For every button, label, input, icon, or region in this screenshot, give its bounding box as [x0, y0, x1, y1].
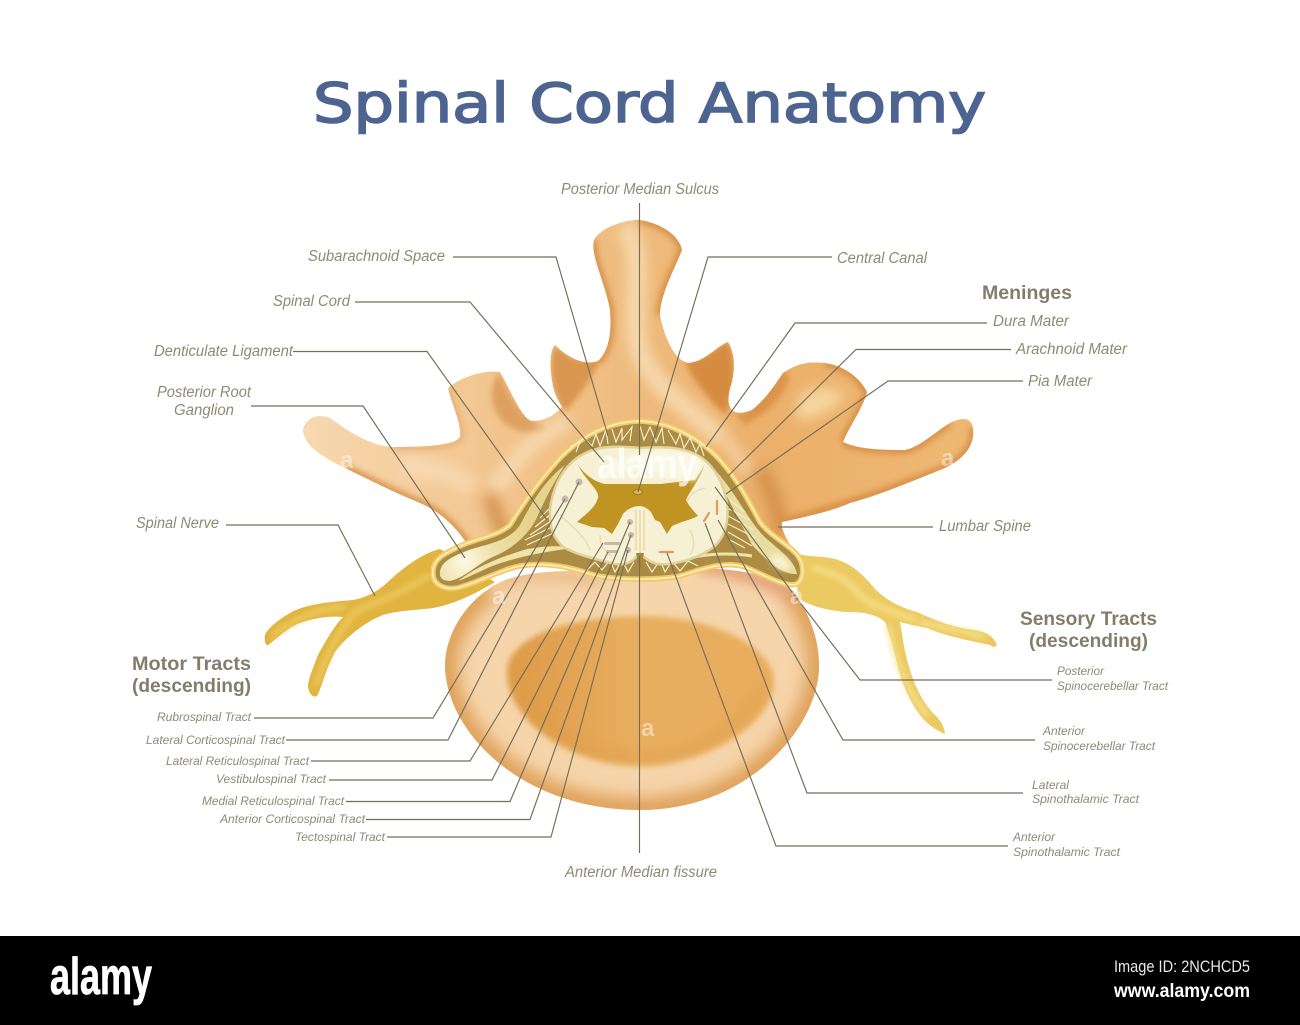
- callout: Rubrospinal Tract: Rubrospinal Tract: [157, 710, 252, 724]
- gray matter butterfly: [577, 465, 704, 534]
- callout: Central Canal: Central Canal: [837, 250, 928, 267]
- heading: Sensory Tracts: [1020, 609, 1157, 652]
- callout: Vestibulospinal Tract: [216, 552, 608, 786]
- callout: Posterior Spinocerebellar Tract: Posterior: [1057, 664, 1105, 678]
- callout: Lateral Spinothalamic Tract: Lateral: [1032, 778, 1069, 792]
- callout: Spinal Cord: [273, 293, 604, 462]
- callout: Anterior Spinothalamic Tract: Spinothalamic Tract: [1013, 845, 1121, 859]
- callout: Anterior Corticospinal Tract: Anterior Corticospinal Tract: [219, 812, 366, 826]
- root sleeves: [440, 465, 797, 581]
- callout: Subarachnoid Space: [308, 248, 608, 436]
- callout: Posterior Root Ganglion: Posterior Root: [157, 384, 252, 401]
- footer bar: [0, 936, 1300, 1025]
- callout: Posterior Spinocerebellar Tract: [715, 487, 1169, 693]
- callout: Lateral Spinothalamic Tract: Spinothalamic Tract: [1032, 792, 1140, 806]
- heading: Meninges: Meninges: [982, 283, 1072, 304]
- footer website: www.alamy.com: [1113, 981, 1250, 1002]
- watermark letters: a: [941, 445, 955, 472]
- callout: Anterior Spinothalamic Tract: [667, 553, 1121, 859]
- footer image id: Image ID: 2NCHCD5: [1114, 957, 1250, 976]
- vertebral body: [445, 565, 819, 810]
- watermark letters: a: [340, 447, 354, 474]
- callout: Lateral Corticospinal Tract: Lateral Corticospinal Tract: [146, 733, 286, 747]
- watermark letters: [340, 445, 955, 742]
- callout: Lateral Spinothalamic Tract: [705, 523, 1140, 806]
- watermark letters: a: [492, 583, 506, 610]
- footer logo: alamy: alamy: [50, 948, 152, 1006]
- callout: Lateral Reticulospinal Tract: Lateral Reticulospinal Tract: [166, 754, 310, 768]
- callout: Posterior Spinocerebellar Tract: Spinocerebellar Tract: [1057, 679, 1169, 693]
- heading: Motor Tracts: (descending): [132, 676, 251, 697]
- callout: Anterior Corticospinal Tract: [219, 535, 631, 826]
- sensory tract markers: [660, 501, 717, 552]
- callout: Anterior Spinothalamic Tract: Anterior: [1012, 830, 1056, 844]
- callout: Vestibulospinal Tract: Vestibulospinal Tract: [216, 772, 327, 786]
- spinal cord white matter: [550, 447, 728, 572]
- callout: Denticulate Ligament: [154, 343, 547, 520]
- callout: Pia Mater: Pia Mater: [1028, 373, 1093, 390]
- callout: Pia Mater: [726, 373, 1093, 494]
- callout: Lateral Reticulospinal Tract: [166, 543, 603, 768]
- heading: Motor Tracts: [132, 654, 251, 697]
- callout: Posterior Root Ganglion: [157, 384, 465, 558]
- heading: Motor Tracts: Motor Tracts: [132, 654, 251, 675]
- heading: Sensory Tracts: (descending): [1029, 631, 1148, 652]
- title: Spinal Cord Anatomy: [313, 72, 986, 135]
- callout: Subarachnoid Space: Subarachnoid Space: [308, 248, 445, 265]
- callout: Medial Reticulospinal Tract: Medial Reticulospinal Tract: [202, 794, 345, 808]
- callout: Spinal Nerve: Spinal Nerve: [136, 515, 219, 532]
- callout: Medial Reticulospinal Tract: [202, 522, 630, 808]
- callout: Rubrospinal Tract: [157, 499, 565, 724]
- vertebral arch and processes: [303, 220, 973, 560]
- image watermark overlay: alamy: [597, 440, 698, 487]
- heading: Sensory Tracts: Sensory Tracts: [1020, 609, 1157, 630]
- right spinal nerve: [795, 552, 997, 734]
- white matter fissure shading: [560, 488, 705, 556]
- callout: Central Canal: [638, 250, 928, 492]
- vertebra illustration: [265, 220, 997, 810]
- callout: Tectospinal Tract: [295, 550, 628, 844]
- callout: Posterior Root Ganglion: Ganglion: [174, 402, 234, 419]
- callout: Anterior Spinocerebellar Tract: Anterior: [1042, 724, 1086, 738]
- left spinal nerve: [265, 549, 495, 697]
- callout: Lumbar Spine: Lumbar Spine: [939, 518, 1031, 535]
- callout: Lateral Corticospinal Tract: [146, 482, 579, 747]
- callout: Anterior Spinocerebellar Tract: Spinocerebellar Tract: [1043, 739, 1156, 753]
- callout: Anterior Spinocerebellar Tract: [718, 520, 1156, 753]
- callout: Denticulate Ligament: Denticulate Ligament: [154, 343, 294, 360]
- callout: Dura Mater: Dura Mater: [993, 313, 1070, 330]
- watermark letters: a: [641, 715, 655, 742]
- callout: Anterior Median fissure: Anterior Median fissure: [564, 864, 717, 881]
- callout: Arachnoid Mater: [728, 341, 1128, 476]
- dura mater and subarachnoid space: [433, 421, 803, 588]
- trabeculae: [525, 426, 756, 572]
- callout: Arachnoid Mater: Arachnoid Mater: [1015, 341, 1128, 358]
- motor tract markers: [562, 478, 634, 553]
- watermark letters: a: [790, 583, 804, 610]
- callout: Spinal Cord: Spinal Cord: [273, 293, 351, 310]
- callout: Tectospinal Tract: Tectospinal Tract: [295, 830, 386, 844]
- callout: Dura Mater: [706, 313, 1070, 447]
- callout: Posterior Median Sulcus: Posterior Median Sulcus: [561, 181, 719, 198]
- callout: Spinal Nerve: [136, 515, 375, 596]
